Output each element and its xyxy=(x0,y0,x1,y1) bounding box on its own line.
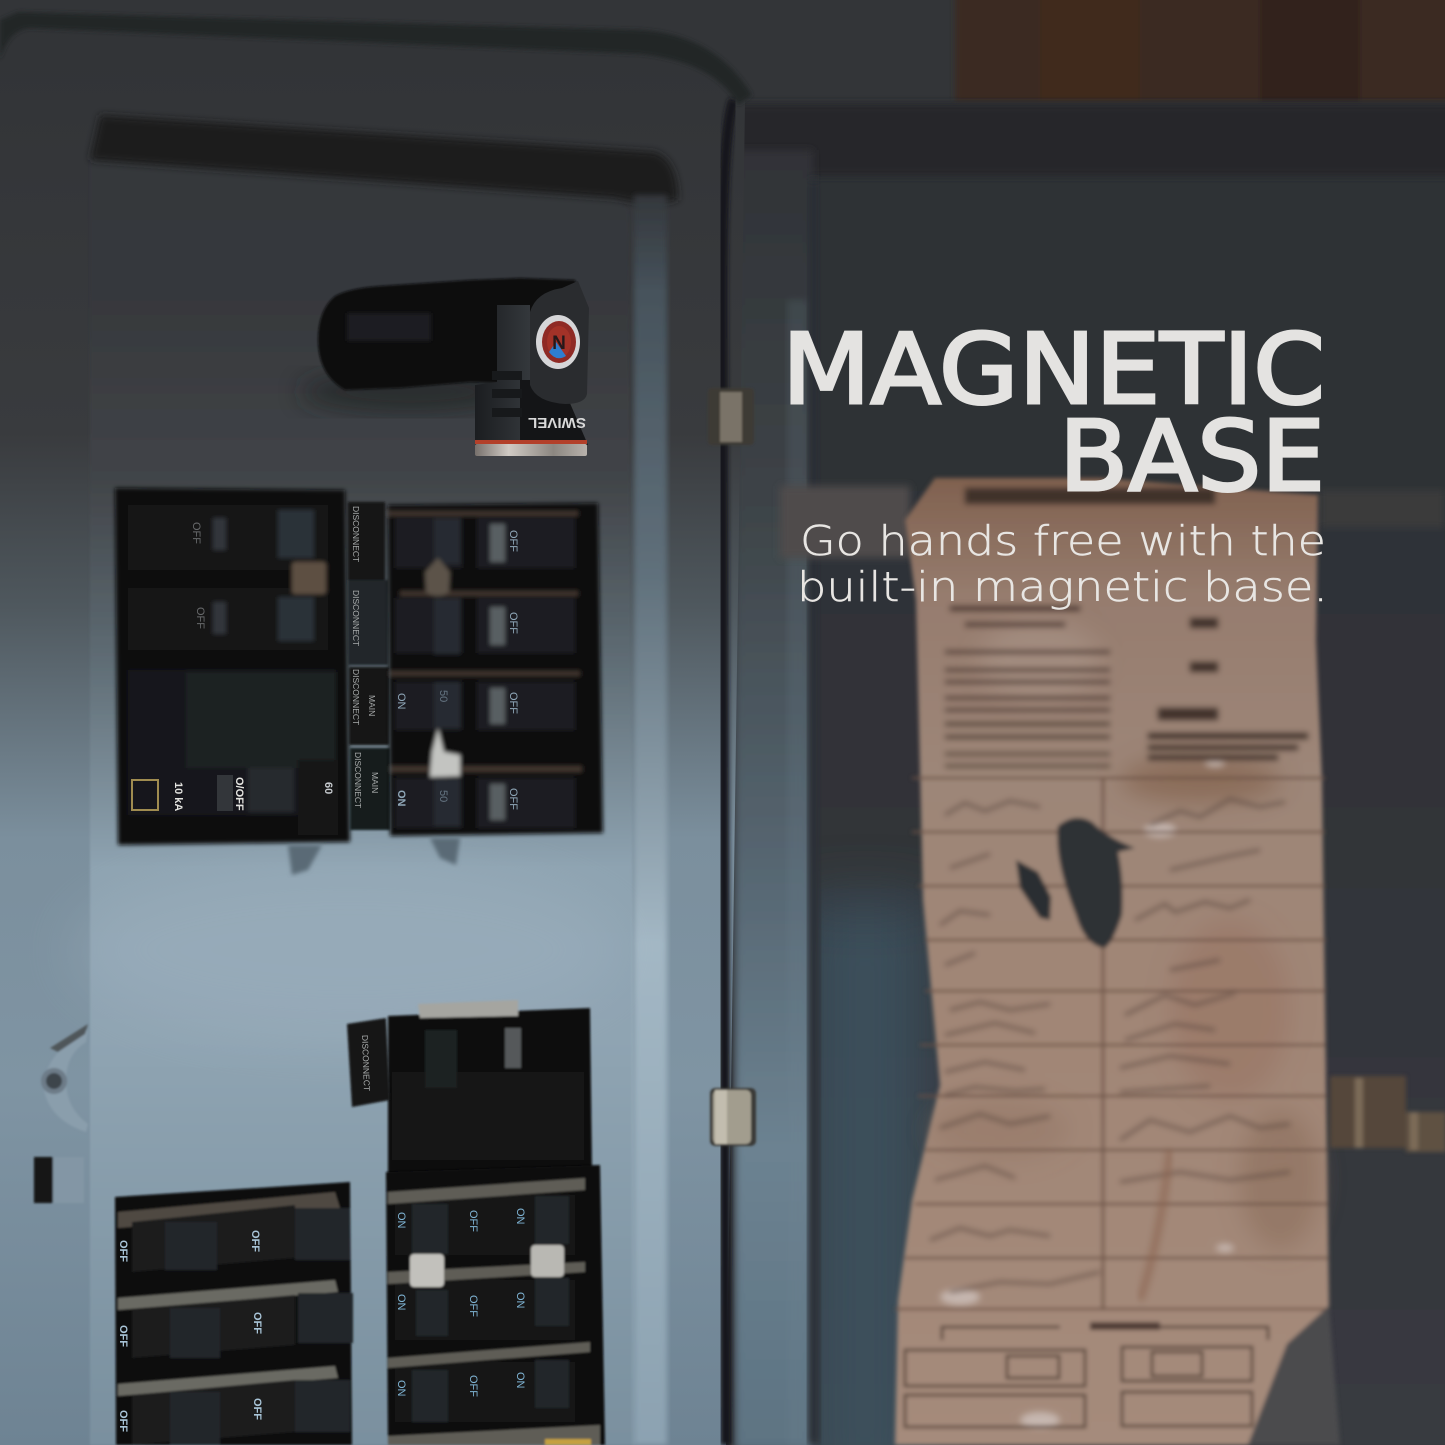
panel: open right door xyxy=(735,104,1445,1445)
bottom left labels: OFF xyxy=(249,1230,261,1252)
flashlight magnetic ring xyxy=(475,440,587,444)
title xyxy=(782,313,1325,513)
right breaker labels xyxy=(395,530,519,810)
paper stain streak xyxy=(1140,1150,1170,1300)
disconnect strip text xyxy=(351,506,380,808)
breaker block: top left xyxy=(115,488,350,845)
subtitle: Go hands free with the xyxy=(800,517,1326,565)
bottom left labels xyxy=(117,1230,263,1432)
circuit breaker logo xyxy=(132,780,158,810)
disconnect strip text: DISCONNECT xyxy=(351,669,361,725)
bottom left labels: OFF xyxy=(117,1325,129,1347)
wood trim top right xyxy=(955,0,1445,102)
bottom left labels: OFF xyxy=(117,1410,129,1432)
bottom right labels: ON xyxy=(395,1212,407,1229)
switch window xyxy=(217,775,233,811)
bottom right labels: ON xyxy=(514,1208,526,1225)
paper white spots xyxy=(940,759,1234,1428)
breaker labels: O/OFF xyxy=(233,777,245,811)
right breaker labels: OFF xyxy=(507,788,519,810)
right hinge plate xyxy=(1330,1076,1445,1152)
bottom left labels: OFF xyxy=(251,1398,263,1420)
hinge lower xyxy=(710,1088,756,1146)
flashlight grooves xyxy=(492,371,522,417)
icon: swivel flashlight xyxy=(318,278,589,456)
breaker labels: OFF xyxy=(194,607,206,629)
shadows under stubs xyxy=(288,845,322,875)
breaker block: bottom upper xyxy=(388,1000,592,1180)
flashlight shadow xyxy=(300,370,520,414)
breaker labels: 60 xyxy=(322,782,334,794)
paper holes xyxy=(1057,818,1135,948)
tape strip near top of the door xyxy=(780,486,910,558)
blue light left of paper xyxy=(800,900,930,1445)
bottom disconnect label xyxy=(347,1018,390,1107)
flashlight barrel xyxy=(318,278,585,390)
right breaker labels: ON xyxy=(395,693,407,710)
recess shadow xyxy=(90,115,678,205)
disconnect strip text: DISCONNECT xyxy=(351,506,361,562)
disconnect strip text: DISCONNECT xyxy=(351,590,361,646)
disconnect strip xyxy=(348,502,390,830)
bottom right labels: OFF xyxy=(467,1295,479,1317)
bottom right labels: ON xyxy=(514,1372,526,1389)
title: BASE xyxy=(1059,400,1325,513)
breaker block: bottom right xyxy=(386,1165,605,1445)
bottom right labels: ON xyxy=(395,1380,407,1397)
right breaker labels: ON xyxy=(395,790,407,807)
door rim xyxy=(0,12,752,105)
subtitle: built-in magnetic base. xyxy=(797,563,1328,611)
disconnect strip text: MAIN xyxy=(370,772,380,793)
bottom right labels xyxy=(395,1208,526,1397)
breaker labels xyxy=(172,522,334,811)
bottom right labels: OFF xyxy=(467,1375,479,1397)
disconnect strip text: DISCONNECT xyxy=(353,752,363,808)
door jamb xyxy=(735,150,813,1445)
right breaker labels: OFF xyxy=(507,530,519,552)
paper handwriting xyxy=(930,799,1290,1292)
paper torn corner xyxy=(1248,1306,1340,1445)
disconnect strip text: MAIN xyxy=(367,695,377,716)
breaker labels: 10 kA xyxy=(172,782,184,811)
right breaker labels: OFF xyxy=(507,692,519,714)
paper printed text xyxy=(945,488,1308,768)
paper ruled table lines xyxy=(895,778,1328,1309)
latch xyxy=(34,1024,88,1203)
breaker block: bottom left xyxy=(115,1182,353,1445)
inner raised panel xyxy=(90,158,636,1445)
bottom right labels: ON xyxy=(395,1294,407,1311)
subtitle xyxy=(797,517,1328,611)
right breaker labels: 50 xyxy=(437,690,449,702)
bottom left labels: OFF xyxy=(251,1312,263,1334)
breaker labels: OFF xyxy=(190,522,202,544)
paper directory label xyxy=(895,478,1340,1445)
title: MAGNETIC xyxy=(782,313,1325,426)
paper stains xyxy=(930,620,1320,1250)
bottom right labels: ON xyxy=(514,1292,526,1309)
flashlight side plate xyxy=(530,281,589,404)
right breaker labels: OFF xyxy=(507,612,519,634)
white light glow xyxy=(70,860,630,1040)
panel: main breaker door xyxy=(0,12,752,1445)
right breaker labels: 50 xyxy=(437,790,449,802)
paper diagram xyxy=(905,1327,1268,1427)
breaker block: top right xyxy=(388,503,603,836)
hinge upper xyxy=(708,388,754,445)
bottom right labels: OFF xyxy=(467,1210,479,1232)
bottom disconnect text: DISCONNECT xyxy=(360,1035,372,1091)
door seam xyxy=(722,100,734,1445)
bottom left labels: OFF xyxy=(117,1240,129,1262)
flashlight power button: N xyxy=(552,333,566,354)
inner panel right bevel xyxy=(634,195,667,1445)
flashlight head xyxy=(475,305,586,445)
flashlight power button xyxy=(536,315,580,369)
flashlight brand text: SWIVEL xyxy=(528,414,586,431)
